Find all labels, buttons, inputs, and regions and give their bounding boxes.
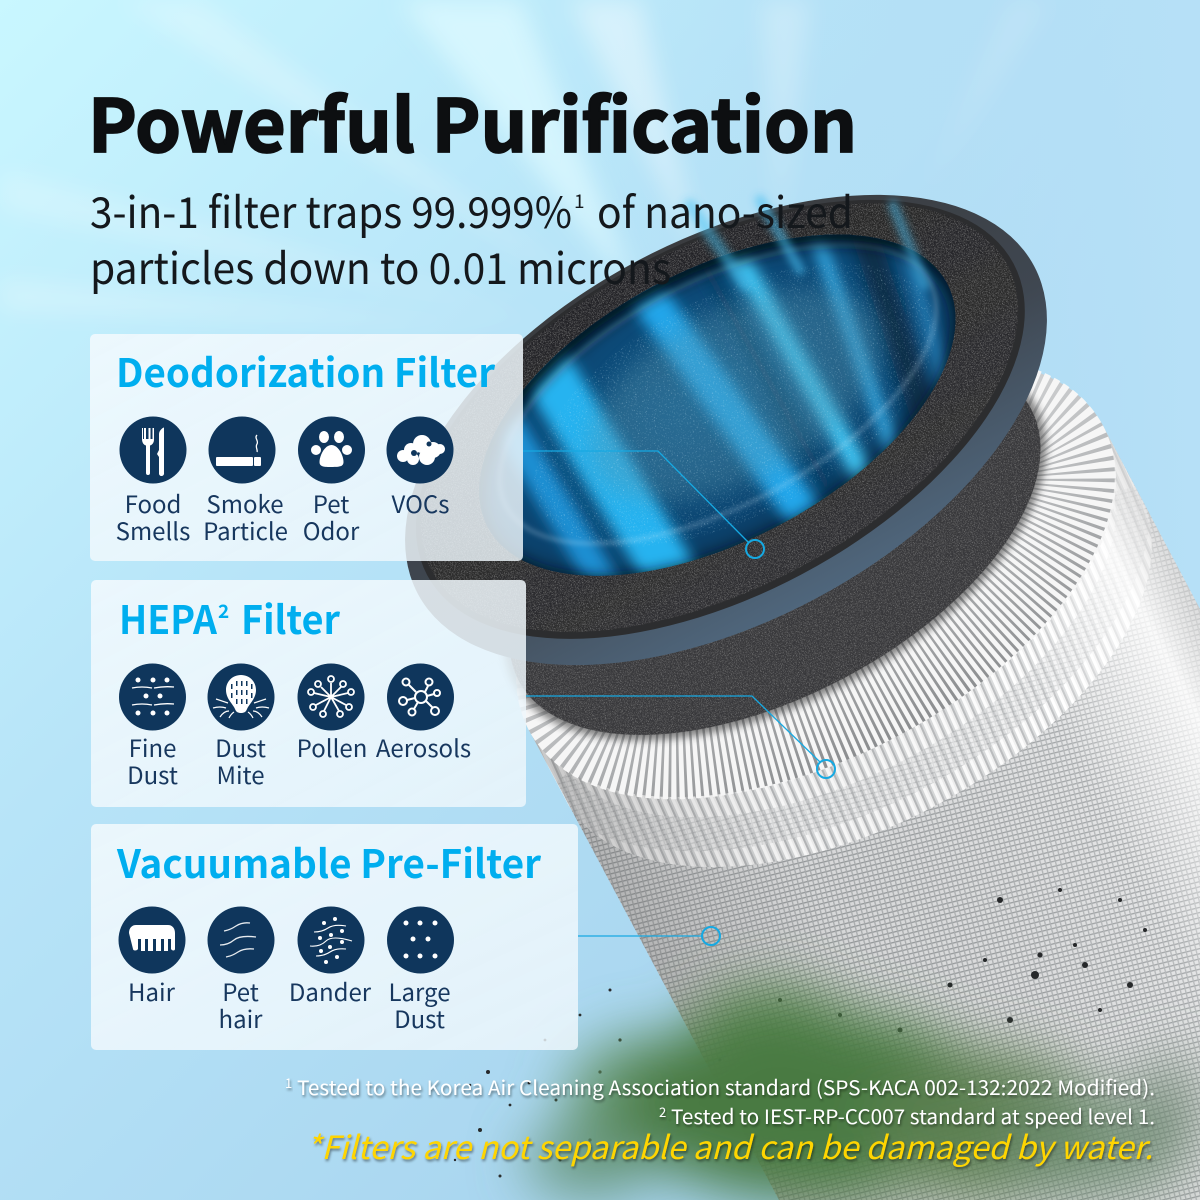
icon: fine dust	[119, 664, 186, 730]
callout: hepa leader	[526, 696, 835, 778]
footnotes: 2	[659, 1102, 666, 1121]
heading: vacuumable pre-filter: Vacuumable Pre-Filter	[116, 834, 542, 890]
heading: deodorization filter: Deodorization Filter	[116, 343, 496, 399]
subtitle: 1	[574, 187, 585, 214]
icon: pet odor	[298, 416, 365, 484]
light rays	[0, 0, 1050, 330]
top gasket ring	[328, 98, 1124, 762]
label: pollen: Pollen	[297, 729, 367, 764]
label: fine dust: Fine	[129, 729, 176, 764]
icon: pollen	[298, 664, 364, 730]
footnotes: Tested to the Korea Air Cleaning Association standard (SPS-KACA 002-132:2022 Modified).	[297, 1072, 1155, 1101]
footnotes: Tested to IEST-RP-CC007 standard at speed level 1.	[671, 1101, 1155, 1130]
icon: dander	[298, 906, 364, 974]
label: smoke particle: Particle	[203, 512, 288, 547]
light streaks over ring	[690, 200, 925, 285]
heading: hepa filter: HEPA	[119, 590, 218, 646]
icon: food smells	[120, 416, 186, 484]
label: pet odor: Odor	[303, 512, 360, 547]
label: pet hair: Pet	[222, 973, 259, 1008]
blue airflow inside filter	[480, 234, 956, 576]
icon: vocs	[386, 416, 454, 484]
label: dander: Dander	[289, 973, 372, 1008]
green smoke	[525, 986, 1200, 1199]
subtitle: of nano-sized	[597, 179, 853, 241]
title: Powerful Purification	[88, 68, 857, 174]
label: large dust: Large	[388, 973, 451, 1008]
callout: deodorization leader	[523, 451, 764, 558]
icon: smoke particle	[208, 416, 276, 484]
label: smoke particle: Smoke	[206, 485, 284, 520]
subtitle: 3-in-1 filter traps 99.999%	[90, 179, 572, 241]
label: pet hair: hair	[218, 1000, 263, 1035]
label: food smells: Smells	[116, 512, 190, 547]
icon: aerosols	[387, 664, 454, 730]
icon: hair comb	[118, 906, 186, 974]
footnotes: 1	[285, 1073, 292, 1092]
dust specks	[454, 888, 1147, 1178]
heading: hepa filter: 2	[218, 597, 229, 624]
icon: pet hair	[208, 906, 274, 974]
subtitle	[90, 179, 853, 297]
filter cylinder	[405, 192, 1200, 1200]
label: hair: Hair	[128, 973, 176, 1008]
label: vocs: VOCs	[392, 485, 449, 520]
footnotes	[285, 1072, 1155, 1130]
panel: deodorization filter	[90, 334, 523, 561]
heading: hepa filter	[119, 590, 341, 646]
icon: dust mite	[208, 664, 274, 730]
label: dust mite: Dust	[215, 729, 266, 764]
water warning: *Filters are not separable and can be damaged by water.	[306, 1123, 1153, 1169]
icon: large dust	[387, 906, 454, 974]
label: fine dust: Dust	[127, 756, 178, 791]
label: aerosols: Aerosols	[376, 729, 471, 764]
dark foam deodorization cylinder	[440, 268, 1110, 822]
subtitle: particles down to 0.01 microns	[90, 235, 671, 297]
panel: hepa filter	[91, 580, 526, 807]
callout: pre-filter leader	[578, 927, 720, 945]
label: large dust: Dust	[394, 1000, 445, 1035]
pre-filter mesh body and pleated HEPA	[517, 370, 1200, 1200]
label: food smells: Food	[125, 485, 181, 520]
label: dust mite: Mite	[216, 756, 265, 791]
panel: vacuumable pre-filter	[91, 824, 578, 1050]
label: pet odor: Pet	[313, 485, 349, 520]
heading: hepa filter: Filter	[241, 590, 341, 646]
